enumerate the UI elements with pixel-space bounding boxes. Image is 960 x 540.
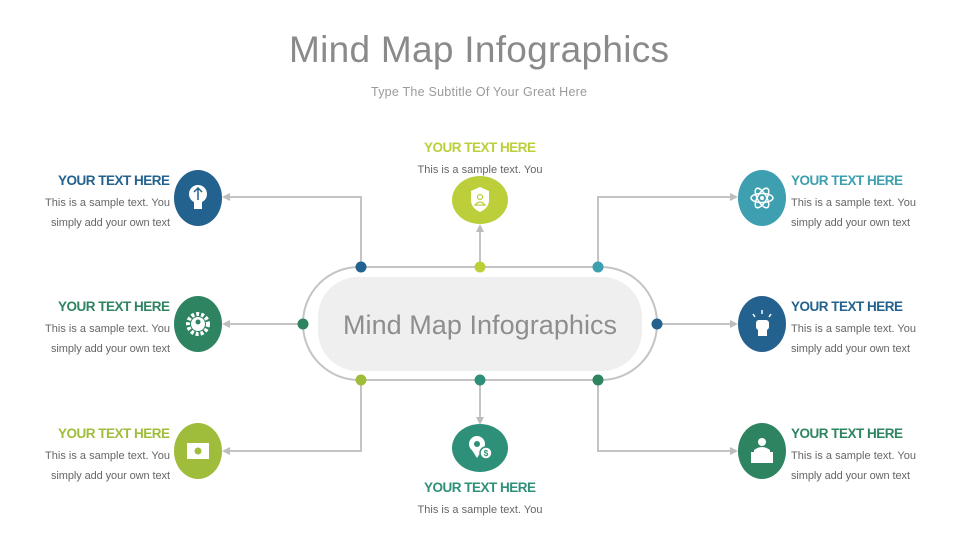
node: left bottom: YOUR TEXT HERE	[58, 426, 170, 441]
node: left bottom: simply add your own text	[51, 470, 170, 482]
icon: machine	[174, 423, 222, 479]
node: left middle: This is a sample text. You	[45, 323, 170, 335]
node: left middle: simply add your own text	[51, 343, 170, 355]
node: left bottom: This is a sample text. You	[45, 450, 170, 462]
node: bottom: This is a sample text. You	[418, 504, 542, 516]
icon: shield user	[452, 176, 508, 224]
node: right bottom: YOUR TEXT HERE	[791, 426, 903, 441]
node: right bottom: simply add your own text	[791, 470, 910, 482]
connector lines	[224, 197, 736, 451]
node: bottom	[418, 424, 542, 516]
node: left top	[45, 170, 222, 229]
node: right middle: simply add your own text	[791, 343, 910, 355]
node: left top: YOUR TEXT HERE	[58, 173, 170, 188]
subtitle: Type The Subtitle Of Your Great Here	[371, 85, 587, 99]
node: top: YOUR TEXT HERE	[424, 140, 536, 155]
icon: location money: $	[484, 449, 489, 458]
node: bottom: YOUR TEXT HERE	[424, 480, 536, 495]
node: right middle: YOUR TEXT HERE	[791, 299, 903, 314]
icon: lightbulb gear	[174, 170, 222, 226]
node: right middle	[738, 296, 916, 355]
node: right top: simply add your own text	[791, 217, 910, 229]
icon: atom	[738, 170, 786, 226]
node: left top: simply add your own text	[51, 217, 170, 229]
node: right middle: This is a sample text. You	[791, 323, 916, 335]
node: right bottom: This is a sample text. You	[791, 450, 916, 462]
icon: fist	[738, 296, 786, 352]
central node: Mind Map Infographics	[343, 310, 617, 340]
node: top: This is a sample text. You	[418, 164, 542, 176]
node: right top: YOUR TEXT HERE	[791, 173, 903, 188]
node: right top	[738, 170, 916, 229]
node: top	[418, 140, 542, 224]
node: left middle	[45, 296, 222, 355]
connector dots	[298, 262, 662, 386]
title: Mind Map Infographics	[289, 29, 669, 70]
central node	[303, 267, 657, 380]
icon: speaker podium	[738, 423, 786, 479]
icon: gear person	[174, 296, 222, 352]
node: left top: This is a sample text. You	[45, 197, 170, 209]
node: right top: This is a sample text. You	[791, 197, 916, 209]
node: right bottom	[738, 423, 916, 482]
node: left bottom	[45, 423, 222, 482]
node: left middle: YOUR TEXT HERE	[58, 299, 170, 314]
